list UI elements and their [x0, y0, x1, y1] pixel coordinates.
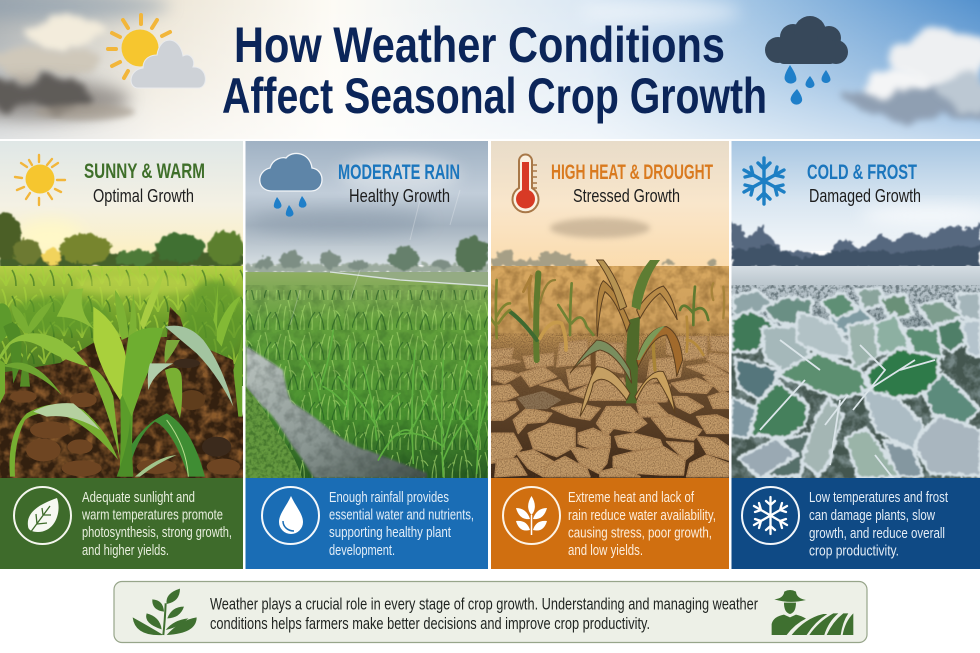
header banner: sky photo: [0, 0, 980, 139]
panel: cold and frost: [731, 141, 980, 500]
panel 4 frosted leaves: [732, 288, 980, 478]
panel 4 icon: snowflake: [744, 158, 784, 204]
panel 1 subheading: Optimal Growth: [93, 186, 194, 206]
caption text: growth, and reduce overall: [809, 526, 945, 542]
panel 4 frozen field: [731, 266, 980, 478]
panel: sunny and warm: [0, 141, 245, 478]
icon: sun behind cloud: [108, 15, 205, 88]
panel 2 rice field: [245, 272, 489, 478]
panel 3 sky: [491, 141, 729, 267]
panel 1 soil: [0, 307, 243, 478]
panel 3 distant trees: [491, 250, 715, 267]
icon: snowflake in circle: [742, 487, 799, 544]
caption text: [568, 490, 716, 559]
caption text: [329, 490, 474, 559]
panel 4 heading: COLD & FROST: [807, 161, 917, 184]
panel 1 corn field rows: [0, 266, 243, 386]
title: Affect Seasonal Crop Growth: [222, 68, 767, 124]
icon: farmer and field: [772, 590, 853, 635]
caption text: and higher yields.: [82, 543, 169, 559]
panel 4 subheading: Damaged Growth: [809, 186, 921, 206]
caption text: crop productivity.: [809, 544, 899, 560]
caption text: can damage plants, slow: [809, 508, 935, 524]
panel 3 cracked soil: [490, 327, 730, 480]
icon: leaf in circle: [14, 487, 71, 544]
caption text: Extreme heat and lack of: [568, 490, 695, 506]
caption text: rain reduce water availability,: [568, 508, 716, 524]
panel 2 subheading: Healthy Growth: [349, 186, 450, 206]
callout text: Weather plays a crucial role in every stage of crop growth. Understanding and managing weather: [210, 596, 758, 614]
icon: storm cloud with rain: [765, 16, 848, 105]
panel: high heat and drought: [490, 141, 730, 480]
panel 3 parched field: [491, 266, 729, 478]
icon: wheat plant in circle: [503, 487, 560, 544]
panel 1 sky: [0, 141, 243, 269]
caption strip: sunny and warm: [0, 478, 243, 569]
caption text: supporting healthy plant: [329, 525, 451, 541]
panel 2 sky: [245, 141, 489, 265]
panel 2 icon: rain cloud: [260, 153, 322, 217]
panel 2 rain streaks: [290, 190, 460, 325]
panel 2 stream: [246, 346, 427, 478]
caption text: and low yields.: [568, 543, 643, 559]
caption text: Enough rainfall provides: [329, 490, 449, 506]
panel 4 leaf veins: [759, 339, 936, 478]
panel 2 foreground rice plants: [300, 330, 488, 477]
panel 4 frosted tree line: [731, 222, 980, 268]
panel: moderate rain: [245, 141, 489, 478]
panel 1 sun glow: [29, 219, 71, 234]
panel 1 foreground corn plant: [0, 268, 233, 477]
panel 1 icon: sun: [15, 155, 65, 205]
caption text: photosynthesis, strong growth,: [82, 525, 232, 541]
caption text: [809, 490, 948, 560]
panel 1 tree line: [0, 212, 244, 268]
panel 3 icon: thermometer: [512, 154, 538, 212]
callout text: conditions helps farmers make better decisions and improve crop productivity.: [210, 615, 650, 633]
callout text: [210, 596, 758, 633]
panel 3 subheading: Stressed Growth: [573, 186, 680, 206]
caption strip: high heat and drought: [491, 478, 729, 569]
caption strip: cold and frost: [732, 478, 980, 569]
caption text: warm temperatures promote: [81, 508, 223, 524]
summary callout: [114, 582, 867, 642]
title: How Weather Conditions: [234, 17, 725, 73]
panel 3 heading: HIGH HEAT & DROUGHT: [551, 161, 713, 184]
panel 2 bank grass: [245, 386, 302, 478]
panel 2 heading: MODERATE RAIN: [338, 161, 460, 184]
panel 1 heading: SUNNY & WARM: [84, 160, 205, 183]
caption text: development.: [329, 543, 395, 559]
caption strip: moderate rain: [246, 478, 488, 569]
caption text: essential water and nutrients,: [329, 508, 474, 524]
panel 2 tree line: [245, 236, 489, 273]
caption text: causing stress, poor growth,: [568, 526, 712, 542]
icon: seedling: [133, 589, 197, 635]
caption text: [81, 490, 232, 559]
caption text: Adequate sunlight and: [82, 490, 195, 506]
panel 1 background corn plants: [0, 280, 242, 417]
panel 4 sky: [731, 141, 980, 251]
icon: water drop in circle: [262, 487, 319, 544]
title: [222, 17, 767, 124]
panel 3 wilted plants: [490, 260, 724, 417]
